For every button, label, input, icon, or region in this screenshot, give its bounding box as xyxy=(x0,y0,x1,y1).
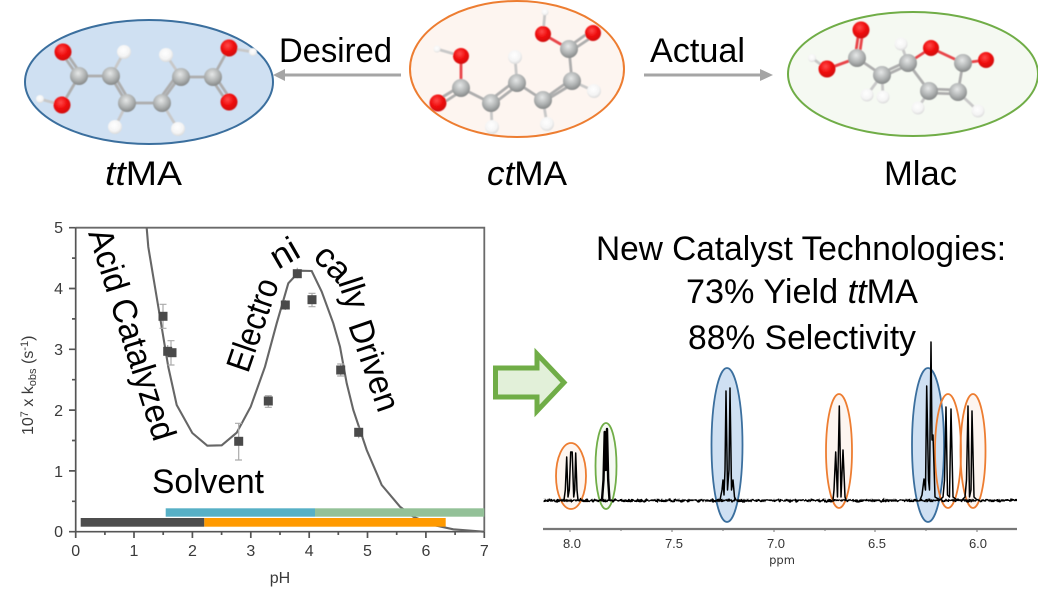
spectrum baseline noise xyxy=(543,499,1017,502)
label: Mlac: Mlac xyxy=(884,155,957,193)
ppm tick labels: 8.0 xyxy=(563,536,581,551)
heading: new catalyst results: 73% Yield ttMA xyxy=(686,273,918,311)
error bars xyxy=(160,268,359,460)
peak highlight: ctMA 6.7 xyxy=(826,394,852,508)
peak highlight: ttMA 6.25 xyxy=(912,368,944,522)
peak highlight: ctMA 8.0 xyxy=(556,443,586,509)
y-axis tick labels: 2 xyxy=(54,403,63,420)
molecule: Mlac ball and stick xyxy=(808,22,994,118)
peak highlight: ttMA 7.25 xyxy=(712,368,742,522)
y-axis title: (s xyxy=(20,351,37,368)
region label: Electronically Driven: ca xyxy=(306,237,360,290)
x-axis tick labels: 0 xyxy=(71,543,80,560)
plot frame xyxy=(76,228,484,532)
heading: new catalyst results: New Catalyst Technologies: xyxy=(596,230,1006,268)
chart: rate constant versus pH xyxy=(19,220,489,587)
ppm tick labels: 7.5 xyxy=(665,536,683,551)
region label: Electronically Driven: Electro xyxy=(220,273,287,377)
y-axis tick labels: 4 xyxy=(54,281,63,298)
region label: Electronically Driven xyxy=(220,230,407,416)
y-axis tick labels: 3 xyxy=(54,342,63,359)
y-axis title: obs xyxy=(27,368,39,386)
NMR spectrum xyxy=(543,342,1017,567)
label: ttMA: ttMA xyxy=(105,155,182,193)
label: ctMA: ctMA xyxy=(487,155,567,193)
x-axis tick labels: 2 xyxy=(188,543,197,560)
y-axis title: -1 xyxy=(19,341,31,351)
y-axis tick labels: 5 xyxy=(54,220,63,237)
y-axis title: 7 xyxy=(19,411,31,417)
molecule: ctMA ball and stick xyxy=(430,8,601,134)
ppm tick labels: 6.5 xyxy=(868,536,886,551)
y-axis title: ) xyxy=(20,336,37,341)
ppm axis xyxy=(543,528,1017,530)
ellipse: Mlac background xyxy=(788,12,1038,136)
region label: Electronically Driven: Driven xyxy=(340,315,407,416)
x-axis tick labels: 4 xyxy=(305,543,314,560)
pH range bars xyxy=(81,508,484,527)
axes and ticks xyxy=(69,228,484,538)
x-axis tick labels: 6 xyxy=(421,543,430,560)
y-axis tick labels: 0 xyxy=(54,524,63,541)
molecule panel: ctMA xyxy=(410,1,624,193)
arrow: Desired: Desired xyxy=(279,32,392,70)
x-axis tick labels xyxy=(71,543,489,560)
peak highlight: ctMA 6.0 xyxy=(960,394,986,508)
fitted curve xyxy=(147,228,483,532)
arrow: Actual xyxy=(644,32,773,81)
x-axis tick labels: 1 xyxy=(130,543,139,560)
molecule panel: ttMA xyxy=(25,20,273,193)
ellipse: ttMA background xyxy=(25,20,273,144)
ppm tick labels xyxy=(563,536,987,551)
region label: Acid Catalyzed: Acid Catalyzed xyxy=(80,224,183,445)
region label: Electronically Driven: ni xyxy=(263,230,306,277)
ppm tick labels: 6.0 xyxy=(969,536,987,551)
peak highlight: Mlac 7.8 xyxy=(596,423,616,509)
y-axis title: x k xyxy=(20,385,37,411)
ppm tick labels: 7.0 xyxy=(767,536,785,551)
arrow: Actual: Actual xyxy=(650,32,745,70)
y-axis tick labels xyxy=(54,220,63,541)
ellipse: ctMA background xyxy=(410,1,624,137)
big arrow: toward new catalyst results xyxy=(496,354,564,411)
molecule: ttMA ball and stick xyxy=(36,40,257,136)
region label: Solvent: Solvent xyxy=(152,463,264,501)
y-axis tick labels: 1 xyxy=(54,464,63,481)
x-axis tick labels: 7 xyxy=(480,543,489,560)
x-axis tick labels: 5 xyxy=(363,543,372,560)
x-axis title: pH xyxy=(270,570,290,587)
ppm axis title: ppm xyxy=(769,553,795,567)
y-axis title: 10 xyxy=(20,417,37,435)
peak highlight: ctMA 6.15 xyxy=(935,394,961,508)
spectrum peaks xyxy=(564,452,578,500)
heading: new catalyst results: 88% Selectivity xyxy=(688,319,917,357)
data points xyxy=(158,269,363,446)
heading: new catalyst results xyxy=(596,230,1006,357)
region label: Electronically Driven: lly xyxy=(330,273,376,315)
x-axis tick labels: 3 xyxy=(246,543,255,560)
molecule panel: Mlac xyxy=(788,12,1038,193)
